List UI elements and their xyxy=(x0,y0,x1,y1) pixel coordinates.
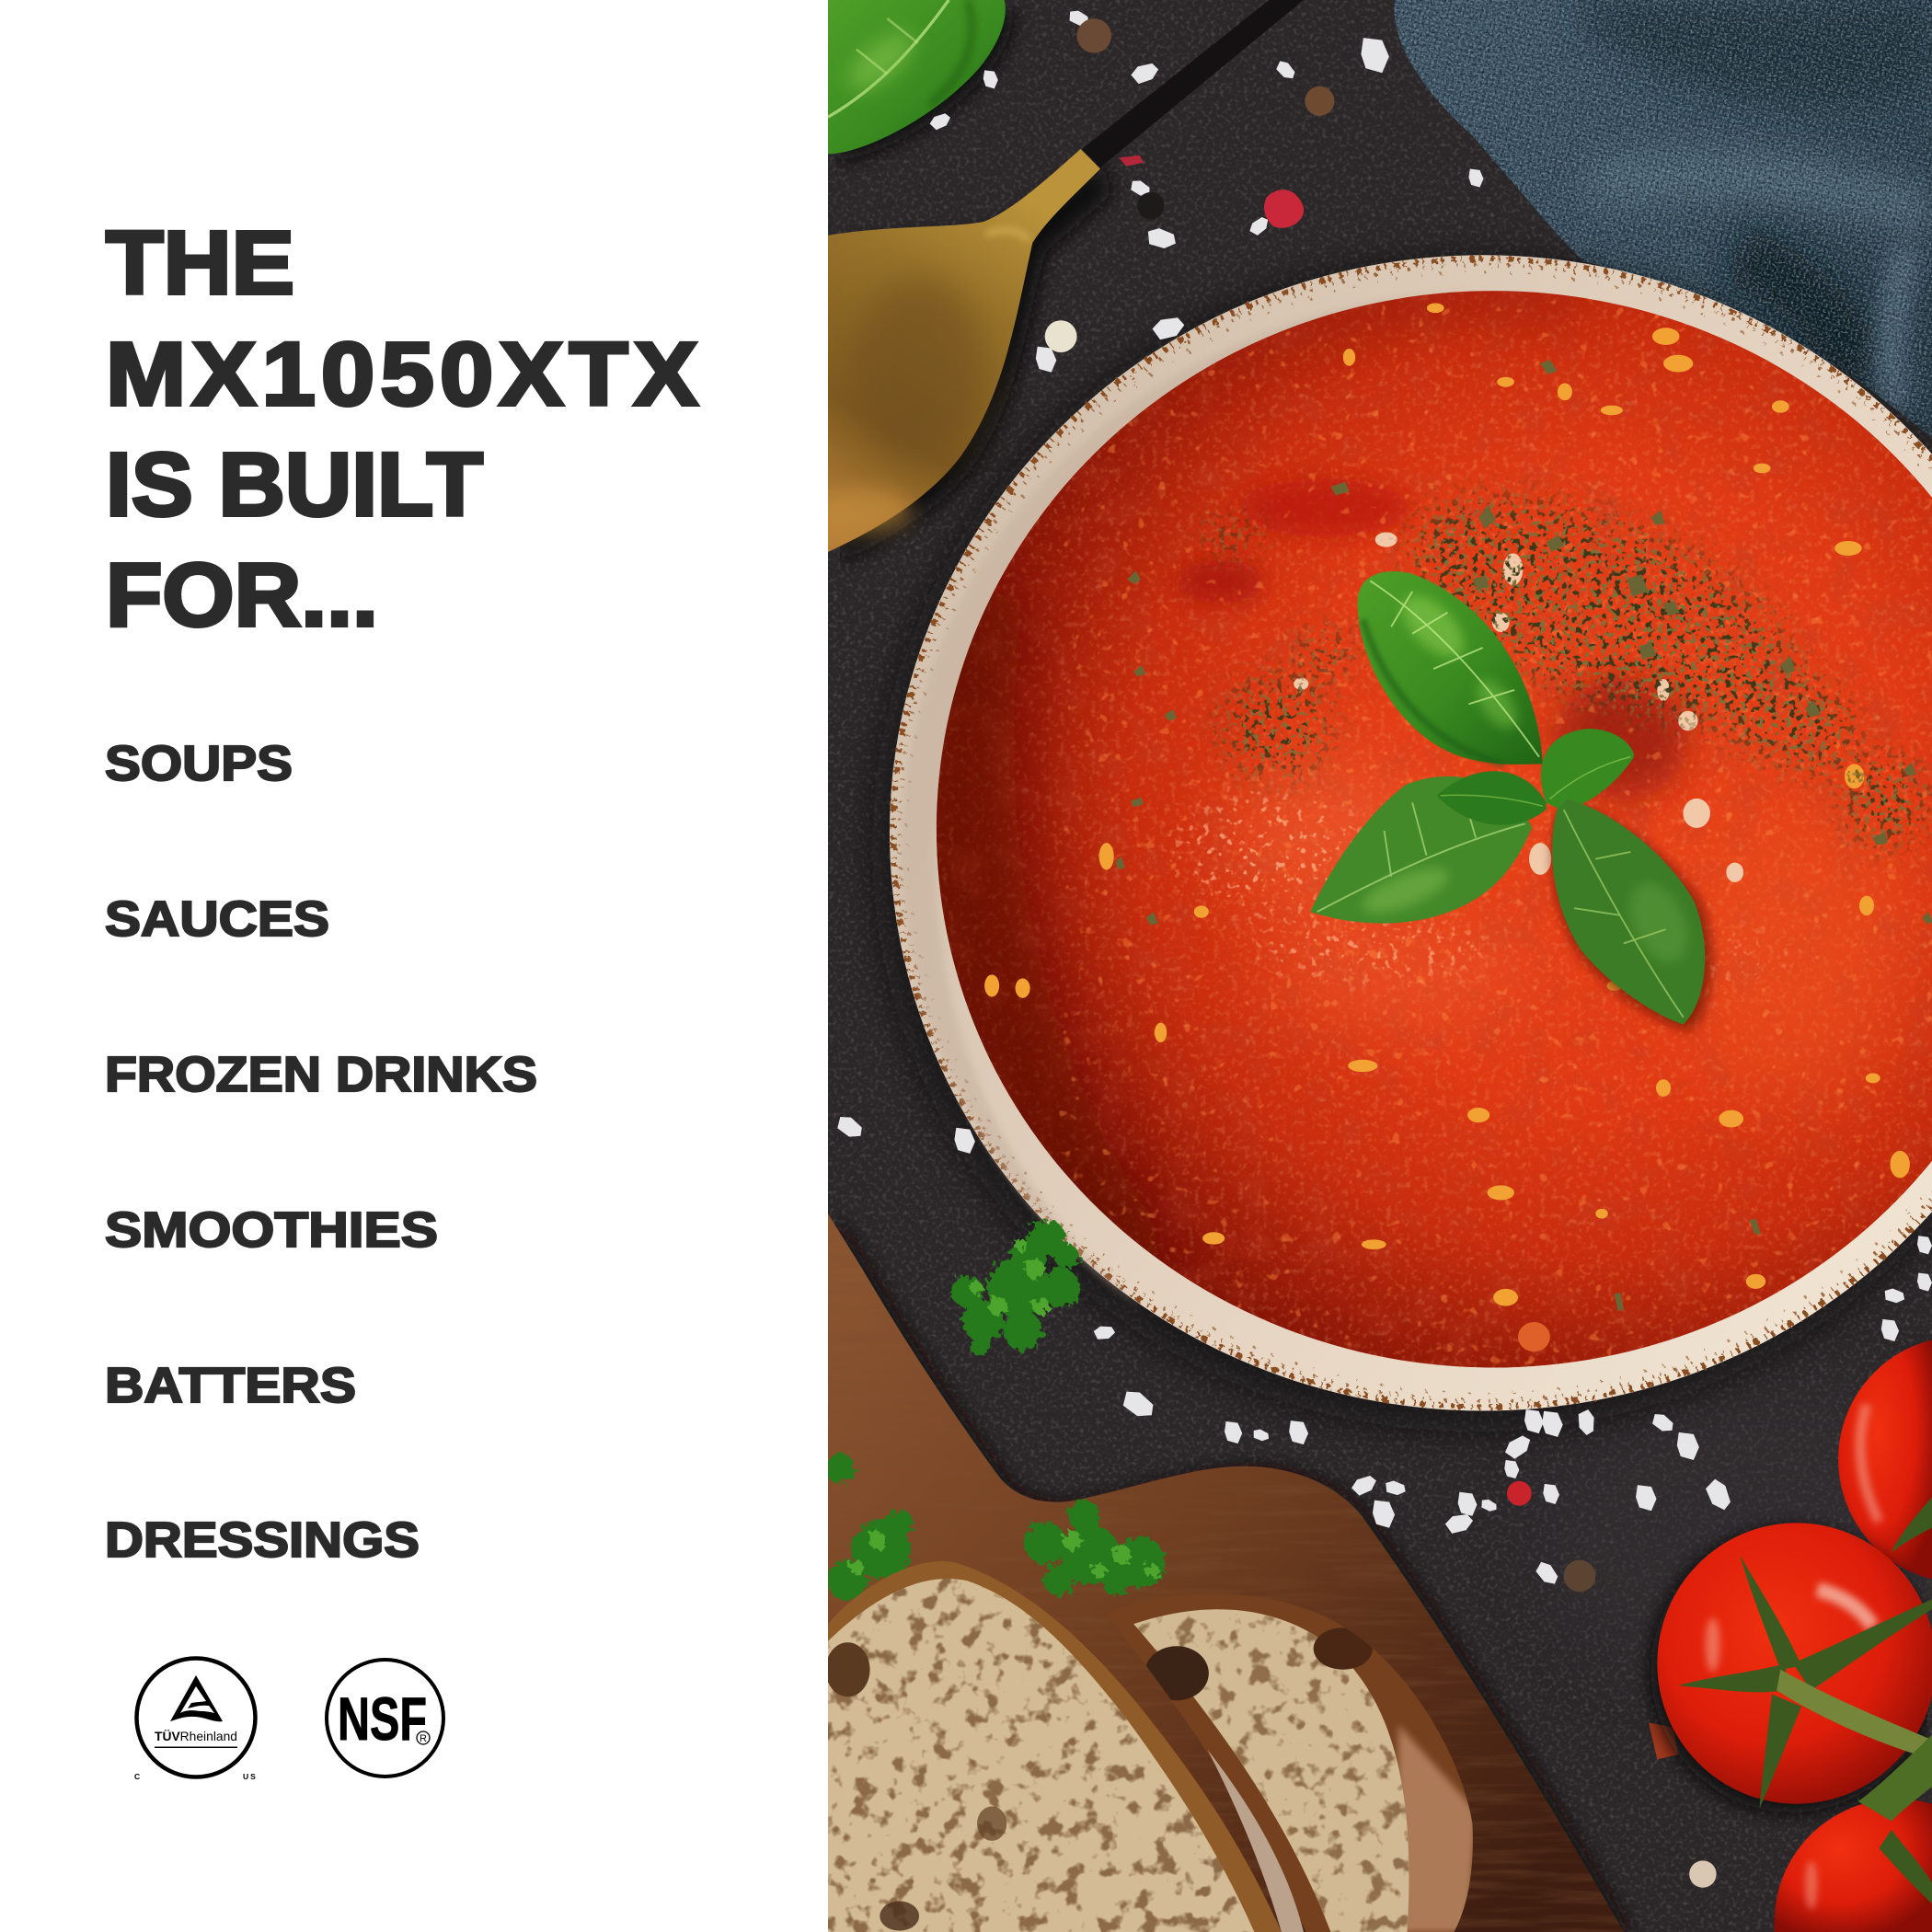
list of uses: FROZEN DRINKS xyxy=(105,1047,537,1102)
list of uses: SOUPS xyxy=(105,736,293,791)
panel: white text column xyxy=(0,0,828,1932)
icon: TÜV Rheinland certification mark xyxy=(134,1658,258,1781)
heading: THE xyxy=(106,213,294,313)
bowl shadow xyxy=(872,259,1932,1432)
centre small leaf xyxy=(1437,771,1547,825)
wooden cutting board xyxy=(828,1213,1631,1932)
leaf shadow xyxy=(1552,806,1712,1031)
right small leaf xyxy=(1541,729,1634,810)
salt crystals and peppercorns xyxy=(834,8,1932,1888)
gold spoon with black handle xyxy=(813,0,1304,562)
seeds and pulp xyxy=(984,303,1910,1351)
icon: TÜV Rheinland certification mark: C xyxy=(134,1772,140,1781)
heading: MX1050XTX xyxy=(106,326,698,424)
tomato stems xyxy=(1678,1497,1932,1903)
bottom right leaf xyxy=(1552,799,1705,1024)
heading xyxy=(106,213,698,645)
panel: food photograph of tomato soup xyxy=(828,0,1932,1932)
basil sprig garnish xyxy=(1310,571,1712,1031)
cherry tomatoes on the vine xyxy=(1651,1340,1932,1932)
list of uses: DRESSINGS xyxy=(105,1512,420,1568)
icon: TÜV Rheinland certification mark: TÜVRheinland xyxy=(155,1729,237,1743)
bread slices xyxy=(825,1561,1476,1932)
icon: TÜV Rheinland certification mark: US xyxy=(243,1772,258,1781)
top leaf xyxy=(1357,571,1543,765)
dark stone table xyxy=(828,0,1932,1932)
glossy highlights on the soup xyxy=(1156,771,1803,1006)
icon: NSF certification mark xyxy=(327,1660,443,1777)
list of uses: SAUCES xyxy=(105,891,329,947)
icon: NSF certification mark: NSF xyxy=(338,1685,427,1753)
basil leaf at top xyxy=(828,0,1013,160)
list of uses: SMOOTHIES xyxy=(105,1202,438,1258)
soup bowl xyxy=(890,255,1932,1410)
list of uses xyxy=(105,736,537,1568)
dried herbs sprinkled on soup xyxy=(1109,360,1932,1311)
parsley sprigs xyxy=(825,1220,1166,1601)
icon: NSF certification mark: R xyxy=(420,1733,427,1744)
tomato soup surface xyxy=(937,291,1932,1368)
lower left leaf xyxy=(1310,776,1532,924)
heading: FOR... xyxy=(106,545,378,645)
heading: IS BUILT xyxy=(106,434,483,535)
speckled bowl rim xyxy=(893,259,1932,1407)
list of uses: BATTERS xyxy=(105,1358,356,1413)
pale side of second slice xyxy=(1207,1750,1304,1932)
blue linen towel xyxy=(1380,0,1932,443)
pulp flecks xyxy=(1060,291,1932,1368)
